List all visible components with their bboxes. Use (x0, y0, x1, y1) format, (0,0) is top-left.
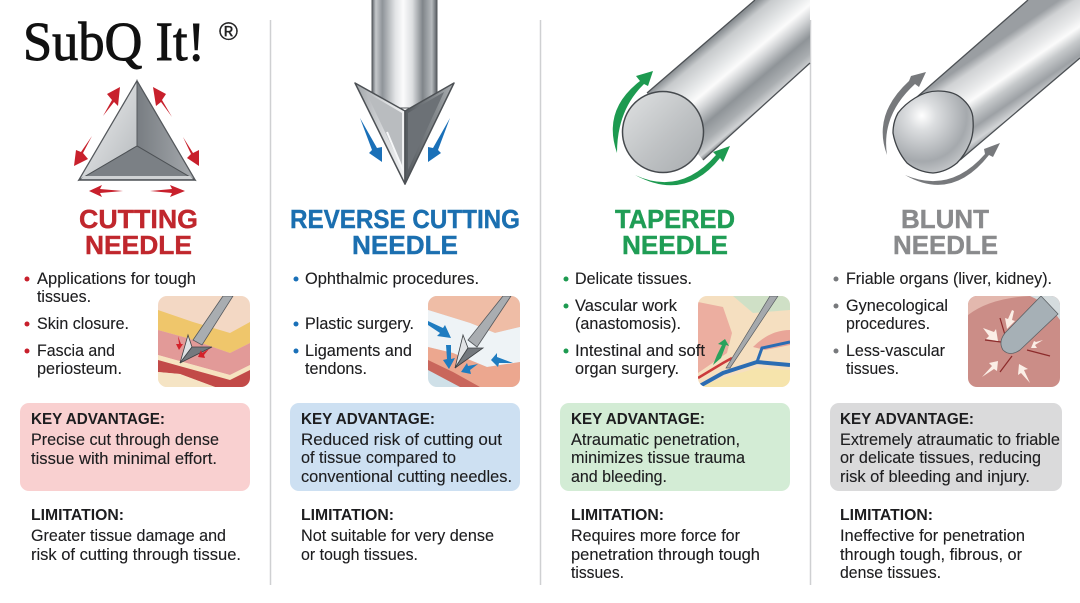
callout: key advantage: Atraumatic penetration, (571, 431, 740, 449)
uses list: organ surgery. (575, 360, 679, 378)
heading: blunt needle: BLUNT (901, 204, 989, 234)
limitation text: Not suitable for very dense (301, 527, 494, 545)
icon: reverse cutting tip (355, 0, 454, 184)
heading: cutting needle: NEEDLE (85, 230, 192, 260)
uses list: Delicate tissues. (575, 270, 692, 288)
callout: key advantage: and bleeding. (571, 468, 667, 486)
uses list: tissues. (846, 360, 899, 378)
callout: key advantage: of tissue compared to (301, 449, 456, 467)
heading: reverse cutting needle: REVERSE CUTTING (290, 204, 520, 234)
uses list: procedures. (846, 315, 930, 333)
uses list: Vascular work (575, 297, 678, 315)
illustration: liver (968, 296, 1060, 387)
limitation text: penetration through tough (571, 546, 760, 564)
callout: key advantage: Extremely atraumatic to friable (840, 431, 1060, 449)
callout: key advantage: KEY ADVANTAGE: (571, 411, 705, 428)
limitation text (840, 507, 1025, 582)
uses list: tendons. (305, 360, 367, 378)
limitation text: LIMITATION: (31, 507, 124, 524)
uses list (24, 270, 196, 378)
callout: key advantage: KEY ADVANTAGE: (31, 411, 165, 428)
panel: reverse cutting needle (290, 0, 520, 564)
callout: key advantage: minimizes tissue trauma (571, 449, 746, 467)
illustration: vessels (698, 296, 790, 387)
callout: key advantage: Precise cut through dense (31, 431, 219, 449)
limitation text: or tough tissues. (301, 546, 418, 564)
uses list: Intestinal and soft (575, 342, 705, 360)
callout: key advantage (830, 403, 1062, 491)
heading: blunt needle: NEEDLE (893, 230, 998, 260)
uses list: Skin closure. (37, 315, 129, 333)
limitation text (31, 507, 241, 564)
callout: key advantage: risk of bleeding and injury. (840, 468, 1030, 486)
uses list: Gynecological (846, 297, 948, 315)
heading: cutting needle: CUTTING (79, 204, 198, 234)
icon: tapered needle shaft (613, 0, 810, 185)
callout: key advantage: or delicate tissues, reducing (840, 449, 1041, 467)
uses list (834, 270, 1052, 378)
panel: tapered needle (560, 0, 810, 582)
uses list: Friable organs (liver, kidney). (846, 270, 1052, 288)
uses list: Applications for tough (37, 270, 196, 288)
callout: key advantage: tissue with minimal effort. (31, 450, 217, 468)
limitation text: LIMITATION: (301, 507, 394, 524)
heading: tapered needle: TAPERED (615, 204, 735, 234)
panel: blunt needle (830, 0, 1080, 582)
uses list: Ligaments and (305, 342, 412, 360)
heading: reverse cutting needle (290, 204, 520, 260)
uses list: tissues. (37, 288, 91, 306)
callout: key advantage (560, 403, 790, 491)
icon: blunt needle shaft (883, 0, 1080, 185)
limitation text: Ineffective for penetration (840, 527, 1025, 545)
heading: reverse cutting needle: NEEDLE (352, 230, 458, 260)
limitation text: Greater tissue damage and (31, 527, 226, 545)
uses list: periosteum. (37, 360, 122, 378)
illustration: skin layers (158, 296, 250, 387)
uses list: Less-vascular (846, 342, 945, 360)
limitation text: through tough, fibrous, or (840, 546, 1022, 564)
callout: key advantage: KEY ADVANTAGE: (301, 411, 435, 428)
illustration: tendon (428, 296, 520, 387)
limitation text: LIMITATION: (840, 507, 933, 524)
limitation text: risk of cutting through tissue. (31, 546, 241, 564)
logo title: ® (219, 18, 239, 46)
uses list: Plastic surgery. (305, 315, 414, 333)
uses list: Ophthalmic procedures. (305, 270, 479, 288)
uses list: Fascia and (37, 342, 115, 360)
limitation text (301, 507, 494, 564)
callout: key advantage: KEY ADVANTAGE: (840, 411, 974, 428)
callout: key advantage (20, 403, 250, 491)
icon: triangular cutting tip (74, 81, 199, 197)
callout: key advantage: conventional cutting needles. (301, 468, 512, 486)
limitation text: Requires more force for (571, 527, 740, 545)
limitation text: dense tissues. (840, 564, 941, 582)
heading: blunt needle (893, 204, 998, 260)
uses list (564, 270, 705, 378)
heading: cutting needle (79, 204, 198, 260)
limitation text (571, 507, 760, 582)
panel: cutting needle (20, 81, 250, 564)
callout: key advantage: Reduced risk of cutting out (301, 431, 502, 449)
heading: tapered needle (615, 204, 735, 260)
uses list (294, 270, 479, 378)
limitation text: tissues. (571, 564, 624, 582)
uses list: (anastomosis). (575, 315, 681, 333)
limitation text: LIMITATION: (571, 507, 664, 524)
heading: tapered needle: NEEDLE (622, 230, 728, 260)
callout: key advantage (290, 403, 520, 491)
logo title: SubQ It! (23, 11, 205, 72)
